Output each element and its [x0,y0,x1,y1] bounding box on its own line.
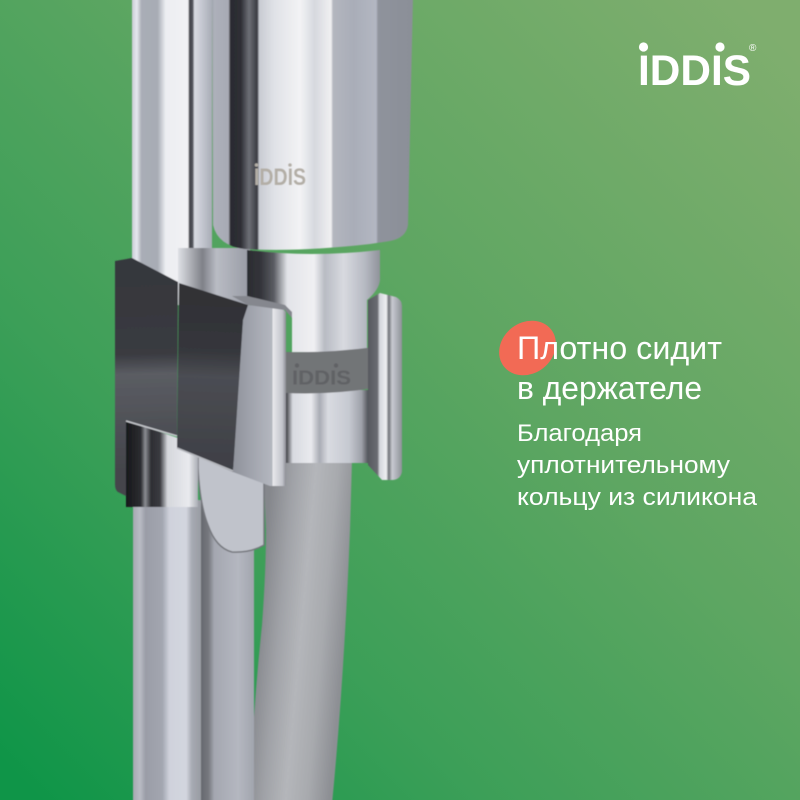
left chrome tube, upper [132,0,212,300]
holder top ledge [232,296,292,318]
chrome collar below ring [286,390,370,463]
description line 3: кольцу из силикона [517,484,758,511]
accent blob behind heading [488,309,567,387]
holder face edge highlight [177,448,233,471]
notch edge highlight [126,421,177,436]
description line 2: уплотнительному [517,452,730,479]
heading line 1: Плотно сидит [517,330,722,366]
registered mark: ® [749,43,757,54]
handle logo dot one [255,163,258,167]
handle logo dot two [288,163,292,167]
ring logo letters: IDDIS [292,368,351,390]
holder left dark face [115,258,178,496]
product photo: shower holder [115,0,413,800]
logo wordmark: IDDIS [638,47,751,95]
lower right pipe [201,500,254,800]
logo dot: second i [715,42,725,52]
rounded pipe cap [198,440,264,552]
handle body [212,0,413,250]
embossed logo on ring [292,363,351,390]
brand logo [638,42,757,95]
chrome inside holder notch [126,420,198,507]
logo dot: first i [639,42,648,52]
engraved logo on handle [254,163,306,191]
lower left pipe [133,500,201,800]
description text [517,420,758,511]
heading [517,330,722,406]
chrome behind holder top edge [178,248,250,305]
handle logo letters: IDDIS [254,164,306,191]
holder right dark face [177,283,248,472]
right clip [368,293,402,480]
heading line 2: в держателе [517,370,702,406]
hose [250,460,352,800]
chrome collar above ring [247,250,380,352]
silicone ring [286,347,375,393]
ring logo dot one [295,363,299,368]
holder chrome side [233,305,286,486]
ring logo dot two [334,363,338,368]
description line 1: Благодаря [517,420,642,447]
